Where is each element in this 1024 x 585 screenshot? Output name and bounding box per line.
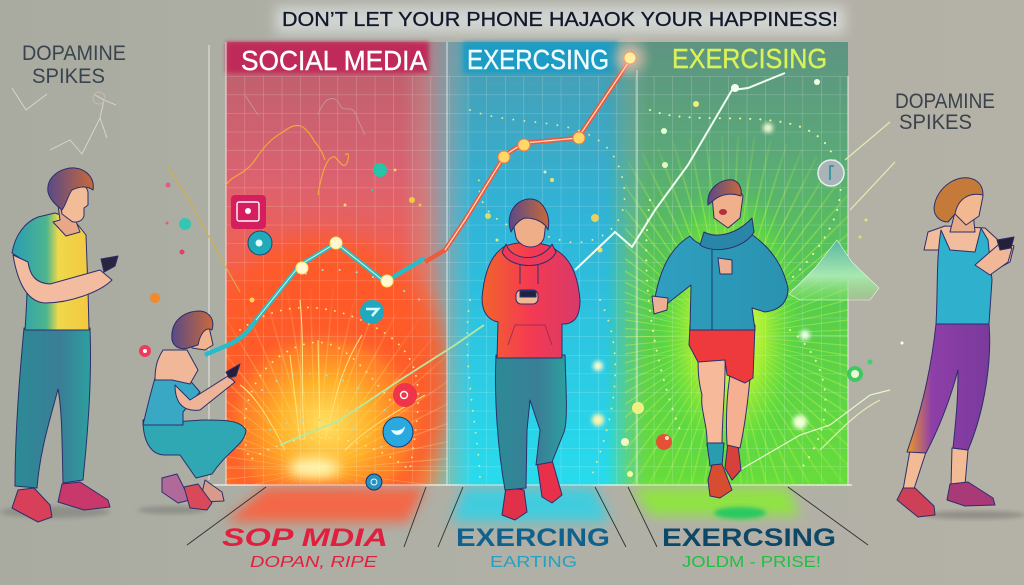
jeans: [15, 328, 91, 488]
chart line: red rising: [425, 44, 644, 262]
phone: [997, 237, 1014, 250]
icon: arrow badge: [360, 300, 384, 324]
tank top: [936, 228, 992, 324]
drawstrings: [520, 264, 538, 284]
panel: blue exercising: [425, 42, 665, 485]
label: left dopamine spikes: DOPAMINE: [22, 42, 126, 65]
doodle spike: top left: [12, 88, 116, 154]
shoulders and arms: [924, 226, 1014, 272]
caption: blue exercising: EARTING: [490, 554, 577, 571]
data point: [330, 237, 342, 249]
data point: [518, 139, 530, 151]
sock: [707, 443, 724, 466]
neck: [950, 212, 975, 232]
jacket: [655, 232, 788, 330]
floor glow: social media: [225, 487, 426, 522]
data point: [731, 84, 739, 92]
figure: man with phone left: [0, 168, 118, 522]
icon: outside teal dot: [179, 218, 191, 230]
heading: green exercising: EXERCISING: [672, 43, 827, 74]
explosion: green rays: [628, 180, 828, 480]
leggings: [907, 324, 990, 453]
axis lines: [205, 42, 852, 485]
face: [192, 322, 213, 350]
title glow: [275, 6, 845, 34]
grid lines: [226, 76, 848, 485]
icon: video app: [231, 195, 266, 229]
right shoe: [947, 482, 995, 506]
back shoe: [725, 442, 741, 480]
hair: [172, 311, 213, 349]
near fist: [718, 258, 732, 274]
mountain: [789, 240, 879, 300]
figure: runner: [652, 180, 788, 498]
caption: green exercising: EXERCSING: [662, 524, 836, 552]
hood collar: [700, 218, 754, 250]
zipper: [711, 250, 713, 330]
data point: [573, 132, 585, 144]
thin squiggle chart: [226, 125, 348, 195]
chart line: low diagonal through burst: [280, 325, 484, 445]
floor dividers: [187, 487, 868, 547]
explosion: social media: [226, 220, 448, 484]
figure: centre man with phone: [482, 199, 580, 520]
neck: [53, 205, 80, 236]
right shoe: [58, 482, 110, 510]
shoulder skin: [155, 350, 198, 384]
calves: [903, 448, 968, 492]
hair: [48, 168, 93, 210]
speckles: [240, 110, 841, 480]
panel: social media: [226, 42, 470, 485]
face: [513, 217, 546, 247]
trousers: [143, 415, 246, 478]
right shoe: [537, 460, 562, 503]
icon: orange dot: [150, 293, 160, 303]
floor glow: blue: [452, 487, 610, 522]
chart line: low diagonal green: [740, 390, 890, 470]
sparkle dots: [166, 79, 904, 477]
faint upper squiggle: [245, 95, 365, 135]
shorts: [689, 325, 755, 383]
floor glow: green: [632, 487, 800, 516]
back leg: [726, 375, 750, 448]
icon: green ring: [847, 366, 863, 382]
icon: pink dot: [139, 345, 151, 357]
doodle head: [93, 92, 105, 104]
hoodie: [482, 242, 580, 358]
data point: [624, 52, 636, 64]
icon: teal dot: [373, 163, 387, 177]
label: right dopamine spikes: [895, 90, 995, 134]
caption: social media: [222, 524, 388, 571]
front shoe: [708, 464, 732, 498]
icon: red badge: [393, 383, 417, 407]
back shoe: [162, 474, 190, 503]
mouth: [719, 209, 727, 215]
green spike line to right: [820, 122, 895, 450]
caption: green exercising: [662, 524, 836, 571]
heading: blue exercising: EXERCSING: [467, 44, 609, 75]
arm: [13, 255, 112, 303]
front leg: [698, 355, 725, 446]
floor shadow under runner: [714, 507, 766, 519]
phone: [101, 256, 118, 272]
pocket: [508, 325, 552, 345]
forearm fist: [652, 296, 668, 314]
chart line: green rising: [575, 73, 785, 270]
figure: woman with phone right: [897, 178, 1024, 519]
left shoe: [12, 488, 52, 522]
hood collar: [502, 244, 556, 266]
data point glow: [616, 44, 644, 72]
heading band: social media: [226, 42, 429, 73]
chart line: social media teal: [205, 237, 425, 355]
label: right dopamine spikes: DOPAMINE: [895, 90, 995, 113]
icon: red ball: [656, 434, 672, 450]
icon: bird badge: [383, 417, 413, 447]
icon: grey music badge: [818, 160, 844, 186]
left shoe: [897, 488, 935, 517]
data point: [296, 262, 308, 274]
caption: blue exercising: [456, 524, 610, 571]
icon: small badge: [366, 474, 382, 490]
icon: teal badge: [248, 231, 272, 255]
hands and phone: [516, 290, 538, 304]
data point: [498, 151, 510, 163]
heading: social media: SOCIAL MEDIA: [241, 45, 427, 76]
caption: green exercising: JOLDM - PRISE!: [682, 554, 821, 571]
caption: social media: SOP MDIA: [222, 524, 388, 552]
front shoe: [184, 484, 212, 510]
panel: green exercising: [605, 42, 848, 485]
label: left dopamine spikes: SPIKES: [32, 65, 105, 88]
splash line: [168, 168, 240, 292]
caption: blue exercising: EXERCING: [456, 524, 610, 552]
mid shoe: [200, 480, 224, 502]
left shoe: [502, 487, 527, 520]
social icons: [139, 160, 863, 490]
face: [712, 189, 743, 228]
hand: [975, 245, 1012, 275]
hair: [708, 180, 741, 205]
label: left dopamine spikes: [22, 42, 126, 88]
figure: crouching woman: [138, 311, 246, 514]
hair: [509, 199, 549, 232]
heading band: blue exercising: [463, 42, 618, 73]
phone: [226, 364, 240, 378]
title: DON’T LET YOUR PHONE HAJAOK YOUR HAPPINESS!: [282, 8, 838, 31]
trousers: [495, 355, 566, 490]
caption: social media: DOPAN, RIPE: [250, 554, 377, 571]
label: right dopamine spikes: SPIKES: [899, 111, 972, 134]
t-shirt: [12, 213, 89, 330]
face: [58, 181, 88, 222]
data point: [381, 275, 393, 287]
face: [950, 188, 983, 225]
arm and hand: [175, 376, 235, 410]
hair: [934, 178, 983, 222]
torso: [143, 376, 200, 425]
